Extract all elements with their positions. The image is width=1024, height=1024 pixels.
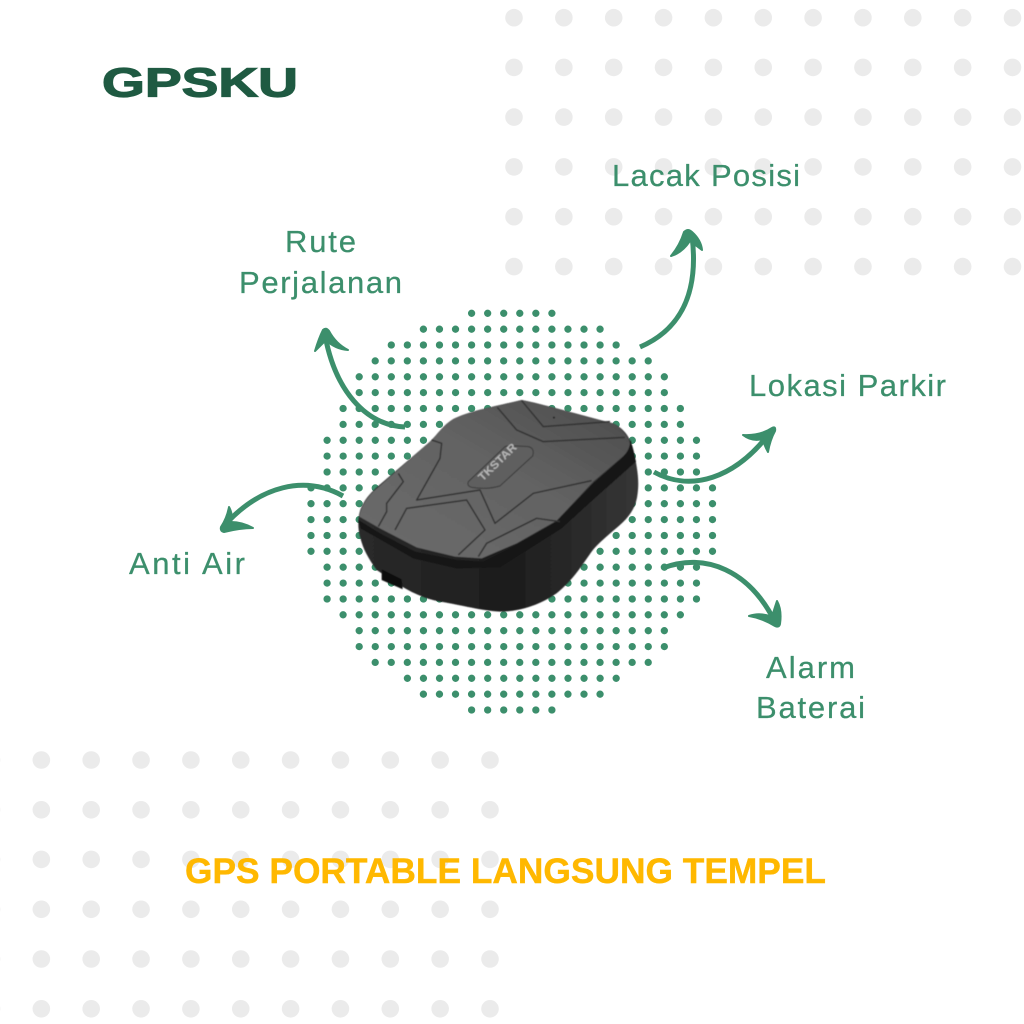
- device edge band: [358, 440, 636, 568]
- green halftone dot circle: [311, 313, 713, 710]
- device pinhole: [553, 417, 555, 419]
- label: Alarm Baterai: Alarm: [766, 650, 855, 685]
- arrow: Anti Air: [221, 485, 343, 532]
- title: GPS PORTABLE LANGSUNG TEMPEL: [185, 852, 826, 891]
- label: Alarm Baterai: Baterai: [756, 690, 865, 725]
- label: Anti Air: Anti Air: [129, 546, 245, 581]
- device top face: [359, 400, 630, 558]
- arrow: Lokasi Parkir: [654, 427, 775, 481]
- device body: [358, 400, 638, 612]
- GPS tracker device: [358, 400, 638, 612]
- label: Rute Perjalanan: Perjalanan: [239, 265, 402, 300]
- device panel grooves: [378, 401, 625, 557]
- label: Lacak Posisi: Lacak Posisi: [612, 158, 800, 193]
- arrow: Rute Perjalanan: [315, 329, 405, 427]
- device charging slot: [382, 569, 403, 589]
- device label plate: TKSTAR: [476, 442, 520, 484]
- arrow: Lacak Posisi: [640, 230, 702, 347]
- arrow: Alarm Baterai: [663, 562, 781, 627]
- device label plate: [468, 442, 533, 488]
- label: Rute Perjalanan: Rute: [285, 224, 356, 259]
- logo: GPSKU: GPSKU: [102, 60, 298, 106]
- label: Lokasi Parkir: Lokasi Parkir: [749, 368, 946, 403]
- label: Alarm Baterai: [756, 650, 865, 725]
- label: Rute Perjalanan: [239, 224, 402, 300]
